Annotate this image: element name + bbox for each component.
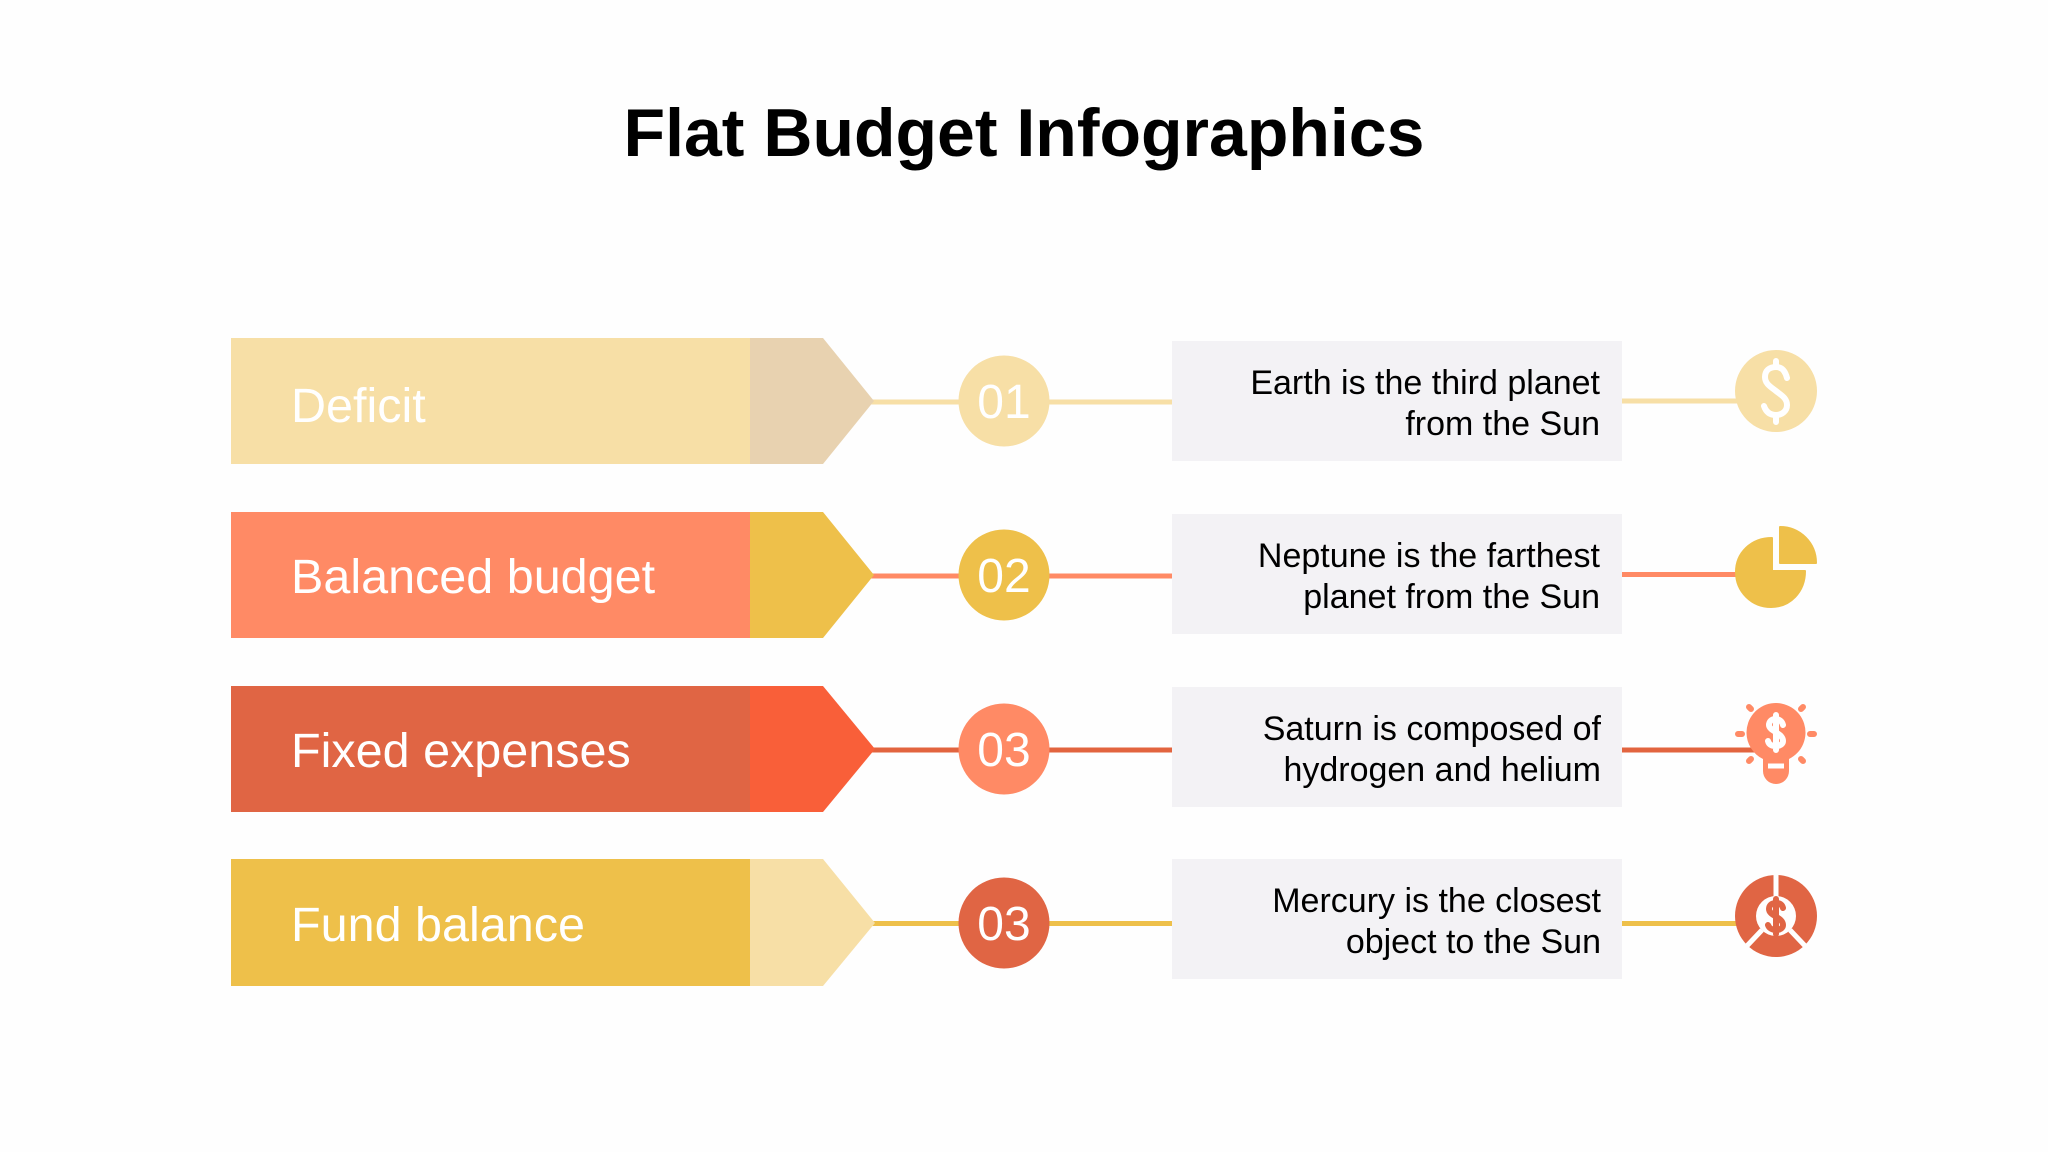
icon: pie chart <box>1736 527 1816 607</box>
number badge 3: 03 <box>977 724 1031 777</box>
label bar 3: Fixed expenses <box>291 724 631 778</box>
description 3 <box>1172 687 1622 807</box>
icon: dollar coin <box>1735 350 1817 432</box>
row 1: Deficit <box>231 338 1817 464</box>
description 4: Mercury is the closest <box>1272 882 1602 920</box>
connector line 3 <box>870 748 1755 752</box>
row 4: Fund balance <box>231 859 1817 986</box>
label bar 4: Fund balance <box>291 898 585 952</box>
description 4: object to the Sun <box>1346 923 1601 961</box>
label bar 2: Balanced budget <box>291 550 656 604</box>
label bar 1: Deficit <box>291 379 426 433</box>
number badge 1 <box>958 356 1050 446</box>
row 2: Balanced budget <box>231 512 1816 638</box>
icon: donut with dollar <box>1735 872 1817 957</box>
connector line 4 <box>870 921 1740 926</box>
label bar 2 <box>231 512 874 638</box>
row 3: Fixed expenses <box>231 686 1814 812</box>
number badge 4 <box>958 878 1050 968</box>
description 3: hydrogen and helium <box>1283 751 1601 789</box>
description 1 <box>1172 341 1622 461</box>
description 1: Earth is the third planet <box>1250 364 1601 402</box>
label bar 4 <box>231 859 875 986</box>
number badge 2: 02 <box>977 550 1031 603</box>
description 4 <box>1172 859 1622 979</box>
number badge 1: 01 <box>977 376 1031 429</box>
description 1: from the Sun <box>1405 405 1600 443</box>
title: Flat Budget Infographics <box>624 95 1424 171</box>
connector line 1 <box>870 401 1740 402</box>
icon: light bulb with dollar <box>1738 703 1814 784</box>
description 2: planet from the Sun <box>1303 578 1600 616</box>
number badge 4: 03 <box>977 898 1031 951</box>
label bar 1 <box>231 338 874 464</box>
connector line 2 <box>870 574 1740 576</box>
number badge 2 <box>958 530 1050 620</box>
description 2 <box>1172 514 1622 634</box>
description 2: Neptune is the farthest <box>1258 537 1601 575</box>
label bar 3 <box>231 686 875 812</box>
description 3: Saturn is composed of <box>1263 710 1602 748</box>
number badge 3 <box>958 704 1050 794</box>
